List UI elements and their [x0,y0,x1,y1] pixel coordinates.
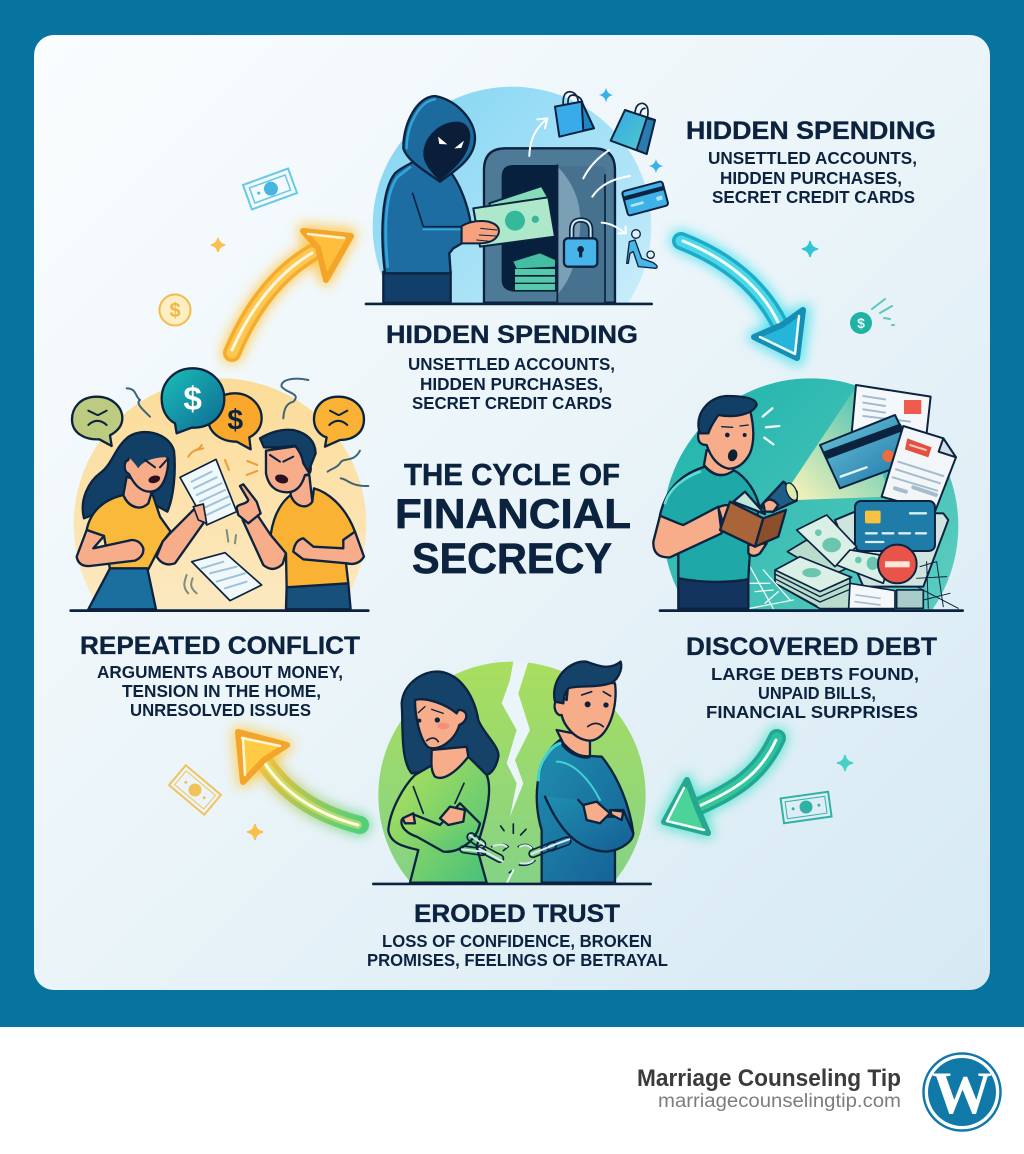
footer brand text: marriagecounselingtip.com [658,1091,901,1112]
icon: sparkle gold [211,238,225,252]
arrow: cyan down-right [681,241,805,360]
figure: man with wallet [653,396,800,609]
heading: eroded trust [367,900,668,970]
illustration: hidden spending safe [364,86,669,306]
center heading: hidden spending: HIDDEN PURCHASES, [420,374,603,394]
icon: bills and credit card [820,385,956,587]
icon: teal coin: $ [857,315,865,331]
center heading: hidden spending [386,321,638,413]
heading: repeated conflict [80,632,360,720]
icon: sparkle cyan [802,241,818,257]
center heading: hidden spending: HIDDEN SPENDING [386,321,638,349]
central panel [34,35,990,990]
icon: safe [484,148,615,303]
surprise lines [763,408,779,444]
icon: gold coin [160,294,190,326]
icon: sparkle teal [837,755,853,771]
arrow: teal down-left [664,738,777,833]
icon: wordpress logo: W [932,1060,992,1126]
icon: wordpress logo [924,1054,1000,1130]
icon: gold coin: $ [169,300,181,322]
illustration: repeated conflict couple [69,367,370,612]
title: SECRECY [412,535,612,583]
icon: teal coin [850,299,894,334]
icon: padlock [564,220,597,267]
figure: woman [388,672,498,883]
heading: discovered debt: UNPAID BILLS, [758,683,876,703]
icon: cash in hand [462,186,555,247]
icon: blue banknote [243,169,297,209]
icon: document in hand [180,459,262,601]
right heading: hidden spending: SECRET CREDIT CARDS [712,187,915,207]
icon: hooded figure [382,96,475,303]
icon: broken chain [460,824,572,883]
icon: gold banknote [169,765,221,815]
heading: repeated conflict: UNRESOLVED ISSUES [130,700,311,720]
title: THE CYCLE OF [404,457,620,492]
figure: woman [77,432,207,609]
heading: discovered debt: LARGE DEBTS FOUND, [711,664,919,684]
icon: speech bubbles [72,368,364,449]
heading: eroded trust: LOSS OF CONFIDENCE, BROKEN [382,931,652,951]
right heading: hidden spending: HIDDEN PURCHASES, [720,168,902,188]
right heading: hidden spending: UNSETTLED ACCOUNTS, [708,148,917,168]
heading: repeated conflict: TENSION IN THE HOME, [122,681,321,701]
heading: eroded trust: ERODED TRUST [414,900,620,928]
icon: speech bubbles: $ [227,404,243,436]
right heading: hidden spending: HIDDEN SPENDING [686,117,936,145]
icon: crack [502,662,530,817]
title: FINANCIAL [395,490,631,537]
right heading: hidden spending [686,117,936,207]
icon: speech bubbles: $ [183,381,202,418]
arrows and sparkles [529,87,663,233]
footer brand text [637,1065,901,1112]
heading: discovered debt: FINANCIAL SURPRISES [706,702,918,722]
marks [184,445,257,593]
figure: man [537,662,633,883]
heading: discovered debt: DISCOVERED DEBT [686,633,937,661]
heading: discovered debt [686,633,937,722]
heading: eroded trust: PROMISES, FEELINGS OF BETRAYAL [367,950,668,970]
heading: repeated conflict: ARGUMENTS ABOUT MONEY, [97,662,343,682]
center heading: hidden spending: UNSETTLED ACCOUNTS, [408,354,615,374]
illustration: eroded trust couple [372,660,652,886]
center heading: hidden spending: SECRET CREDIT CARDS [412,393,612,413]
figure: man [237,430,364,609]
icon: shopping bags and card [555,92,669,216]
illustration: discovered debt [652,378,964,612]
arrow: yellow up-right [232,230,351,353]
icon: piles of cash [775,515,923,609]
icon: sparkle gold lower [247,824,263,840]
arrow: green to yellow up-left [238,732,360,825]
title [395,457,631,583]
icon: cobwebs [748,562,958,609]
squiggles [127,379,368,486]
footer brand text: Marriage Counseling Tip [637,1065,901,1092]
icon: high heel [627,230,657,268]
icon: teal banknote [781,792,832,823]
heading: repeated conflict: REPEATED CONFLICT [80,632,360,660]
